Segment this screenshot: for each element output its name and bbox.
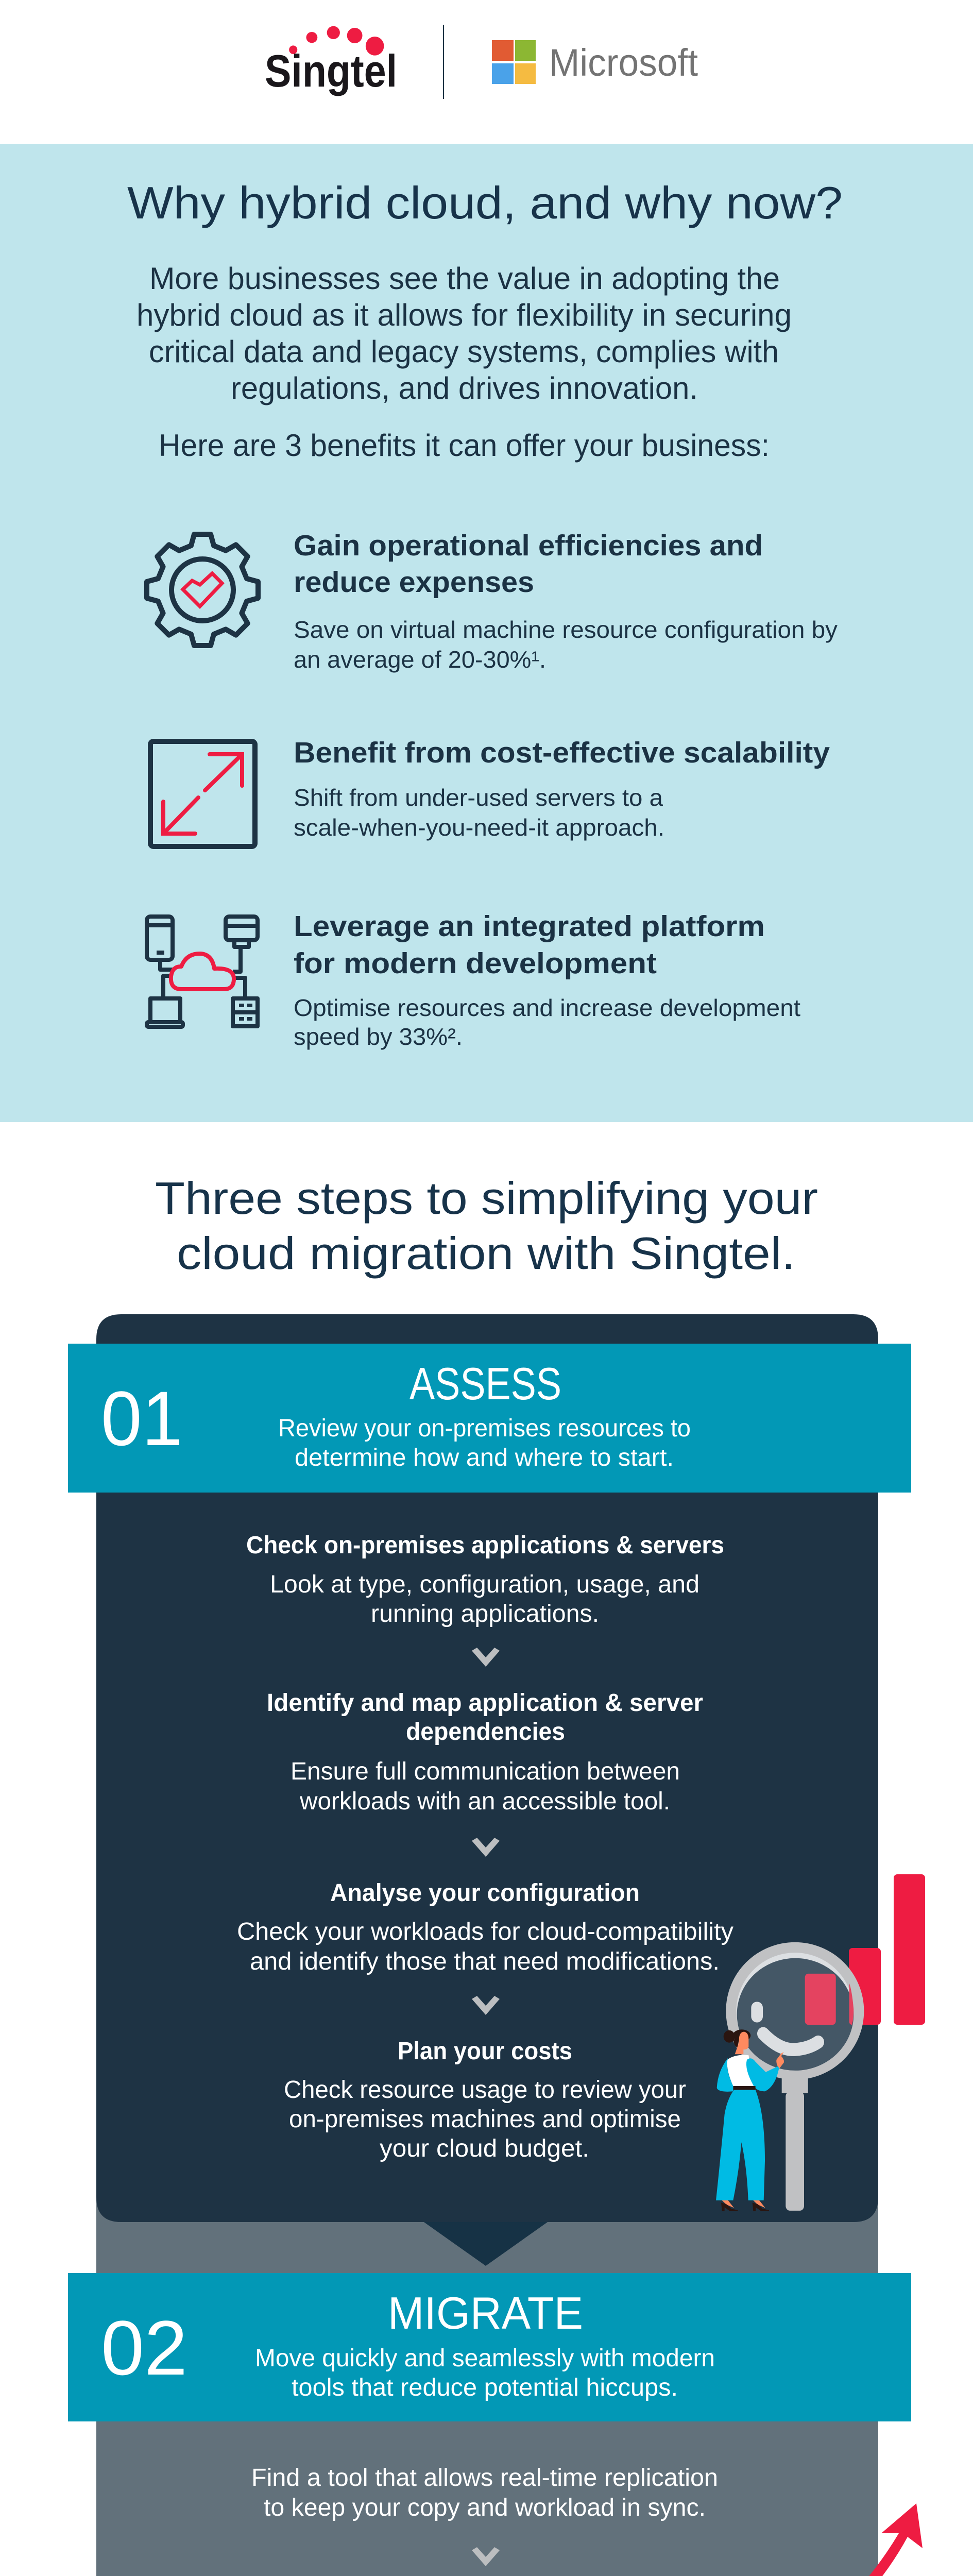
icon: resize arrows xyxy=(150,741,255,846)
heading: why hybrid cloud: Why hybrid cloud, and why now? xyxy=(127,177,843,228)
item: check on-premises xyxy=(246,1532,724,1628)
woman figure xyxy=(716,2029,784,2211)
chevron xyxy=(472,1648,500,1667)
benefit 2 text: scale-when-you-need-it approach. xyxy=(294,814,664,841)
benefit 3 text xyxy=(294,910,800,1050)
benefit 3: integrated platform xyxy=(147,910,800,1050)
item: identify and map xyxy=(267,1689,703,1815)
step title migrate: MIGRATE xyxy=(388,2287,583,2338)
step summary: Move quickly and seamlessly with modern xyxy=(255,2345,715,2372)
step summary: Review your on-premises resources to xyxy=(278,1415,691,1442)
step number 01: 01 xyxy=(101,1375,183,1462)
logo: Microsoft: Microsoft xyxy=(549,41,698,84)
intro text: regulations, and drives innovation. xyxy=(231,371,698,405)
divider xyxy=(443,25,444,99)
item: identify and map: Identify and map application & server xyxy=(267,1689,703,1717)
chevron xyxy=(472,1838,500,1857)
item: plan your costs: Check resource usage to review your xyxy=(284,2076,686,2104)
intro text: critical data and legacy systems, complies with xyxy=(149,334,779,369)
benefit 2: scalability xyxy=(150,736,830,846)
logo: Singtel: Singtel xyxy=(265,45,397,96)
benefit 1: operational efficiencies xyxy=(147,529,838,673)
intro text: More businesses see the value in adopting the xyxy=(149,261,780,296)
chevron xyxy=(472,2547,500,2566)
step 2 content xyxy=(251,2464,718,2576)
item: check on-premises: Check on-premises applications & servers xyxy=(246,1532,724,1559)
step 1 band: assess xyxy=(68,1344,911,1493)
item: check on-premises: running applications. xyxy=(371,1600,599,1628)
item: identify and map: dependencies xyxy=(406,1718,565,1745)
panel: why hybrid cloud xyxy=(0,144,973,1122)
step summary: determine how and where to start. xyxy=(295,1444,674,1471)
step summary xyxy=(278,1415,691,1471)
step summary: tools that reduce potential hiccups. xyxy=(292,2374,678,2401)
benefit 2 text: Shift from under-used servers to a xyxy=(294,784,663,811)
magnifier xyxy=(726,1942,864,2211)
logo: Microsoft xyxy=(492,40,698,84)
bar chart xyxy=(849,1874,925,2025)
heading: three steps: cloud migration with Singtel. xyxy=(177,1228,795,1279)
heading: three steps xyxy=(155,1173,818,1279)
heading: three steps: Three steps to simplifying your xyxy=(155,1173,818,1224)
step number 02: 02 xyxy=(101,2304,187,2391)
item: analyse: and identify those that need modifications. xyxy=(250,1948,720,1975)
item: real-time replication xyxy=(251,2464,718,2521)
item: analyse: Check your workloads for cloud-compatibility xyxy=(237,1918,733,1945)
item: check on-premises: Look at type, configuration, usage, and xyxy=(270,1571,699,1598)
benefit 3 text: Leverage an integrated platform xyxy=(294,910,765,943)
panel: step 2 background xyxy=(96,2164,878,2576)
chevron xyxy=(472,1996,500,2015)
item: plan your costs: Plan your costs xyxy=(398,2038,572,2065)
benefit 3 text: for modern development xyxy=(294,947,657,980)
intro text: hybrid cloud as it allows for flexibility in securing xyxy=(136,298,792,332)
item: real-time replication: to keep your copy and workload in sync. xyxy=(264,2494,706,2521)
step 1 content xyxy=(237,1532,733,2162)
item: identify and map: Ensure full communication between xyxy=(291,1758,680,1785)
item: plan your costs: your cloud budget. xyxy=(380,2135,589,2162)
step title assess: ASSESS xyxy=(409,1358,561,1409)
icon: gear with check xyxy=(147,534,258,646)
intro text xyxy=(136,261,792,463)
benefit 3 text: Optimise resources and increase development xyxy=(294,994,800,1021)
logo: Singtel xyxy=(265,26,397,96)
item: analyse xyxy=(237,1879,733,1975)
item: analyse: Analyse your configuration xyxy=(330,1879,640,1907)
item: plan your costs: on-premises machines and optimise xyxy=(289,2106,681,2133)
benefit 1 text: Gain operational efficiencies and xyxy=(294,529,763,562)
arrow: growth xyxy=(774,2503,923,2576)
benefit 1 text: Save on virtual machine resource configuration by xyxy=(294,616,838,643)
illustration: man with laptop and rising arrow xyxy=(695,2503,923,2576)
intro text: Here are 3 benefits it can offer your business: xyxy=(159,428,770,463)
connector triangle: step 1 to 2 xyxy=(424,2222,548,2266)
item: real-time replication: Find a tool that allows real-time replication xyxy=(251,2464,718,2492)
panel: step 1 background xyxy=(96,1314,878,2222)
item: plan your costs xyxy=(284,2038,686,2162)
icon: cloud network xyxy=(147,917,258,1027)
step summary xyxy=(255,2345,715,2401)
step 2 band: migrate xyxy=(68,2273,911,2421)
benefit 1 text: an average of 20-30%¹. xyxy=(294,646,546,673)
benefit 2 text xyxy=(294,736,830,841)
item: identify and map: workloads with an accessible tool. xyxy=(299,1788,670,1815)
illustration: woman with magnifier and bars xyxy=(716,1874,925,2211)
header: logos xyxy=(265,25,698,99)
benefit 1 text: reduce expenses xyxy=(294,566,534,599)
benefit 3 text: speed by 33%². xyxy=(294,1023,463,1050)
benefit 1 text xyxy=(294,529,838,673)
benefit 2 text: Benefit from cost-effective scalability xyxy=(294,736,830,769)
